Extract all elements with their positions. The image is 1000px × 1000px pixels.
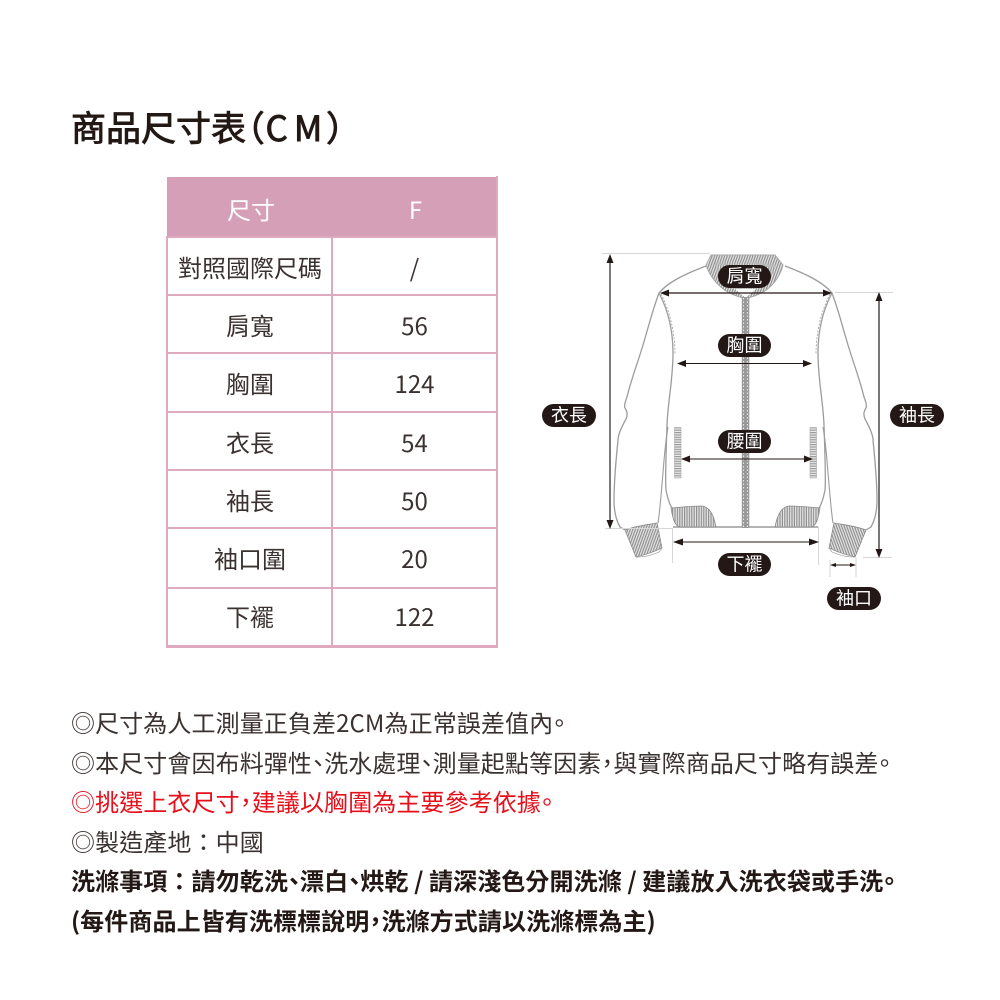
row: 袖口圍: 袖口圍 [214,540,286,575]
label: 袖長: 袖長 [899,402,935,428]
note: measurement tolerance: ◎尺寸為人工測量正負差2CM為正常誤差值內。 [71,704,565,739]
row: 袖長 [226,482,428,517]
label: 腰圍 [718,428,771,454]
label: 下襬 [718,550,771,576]
label: 袖口 [827,584,881,610]
label: 胸圍 [718,332,771,358]
table header row: F [409,191,422,226]
row: 下襬: 122 [395,598,434,633]
row: 肩寬: 肩寬 [226,307,274,342]
row: 肩寬 [226,307,428,342]
row: 袖口圍: 20 [401,540,428,575]
collar [706,255,783,298]
note: size variance: ◎本尺寸會因布料彈性、洗水處理、測量起點等因素，與實際商品尺寸略有誤差。 [71,744,891,779]
label: 袖長 [890,402,944,428]
table header row [167,177,497,236]
label: 肩寬 [718,262,771,288]
row: 肩寬: 56 [401,307,428,342]
arrow: hem [673,538,819,546]
arrow: sleeve length [876,292,882,558]
label: 腰圍: 腰圍 [726,428,762,454]
ribbed hems, cuffs, pockets [625,428,866,557]
title: 商品尺寸表（CM） [71,101,345,152]
arrow: shoulder [660,290,832,296]
table header row: 尺寸 [227,191,275,226]
arrow: cuff [830,563,856,567]
row: 袖長: 袖長 [226,482,274,517]
row: 衣長: 衣長 [226,424,274,459]
zipper [742,297,749,528]
row: 袖口圍 [214,540,428,575]
note: wash label remark: (每件商品上皆有洗標標說明，洗滌方式請以洗滌標為主) [71,902,656,937]
row: 對照國際尺碼: 對照國際尺碼 [178,249,322,284]
size table [166,176,498,648]
row: 胸圍: 124 [395,365,434,400]
label: 衣長 [542,402,596,428]
arrow: waist [681,456,813,462]
row: 衣長 [226,424,428,459]
label: 下襬: 下襬 [726,550,762,576]
note: origin: ◎製造產地：中國 [71,823,264,858]
arrow: body length [606,254,614,529]
note: washing instructions: 洗滌事項：請勿乾洗、漂白、烘乾 / 請深淺色分開洗滌 / 建議放入洗衣袋或手洗。 [71,862,895,897]
row: 下襬: 下襬 [226,598,274,633]
arrow: chest [677,360,812,367]
label: 肩寬: 肩寬 [726,262,762,288]
label: 胸圍: 胸圍 [726,332,762,358]
row: 胸圍 [226,365,434,400]
row: 下襬 [226,598,434,633]
row: 袖長: 50 [401,482,428,517]
row: 對照國際尺碼 [178,249,419,284]
row: 對照國際尺碼: / [410,249,419,284]
row: 胸圍: 胸圍 [226,365,274,400]
label: 衣長: 衣長 [551,402,587,428]
row: 衣長: 54 [401,424,428,459]
note: red sizing advice: ◎挑選上衣尺寸，建議以胸圍為主要參考依據。 [71,783,553,818]
guide lines [602,254,893,577]
jacket outline [614,255,877,557]
label: 袖口: 袖口 [836,584,872,610]
